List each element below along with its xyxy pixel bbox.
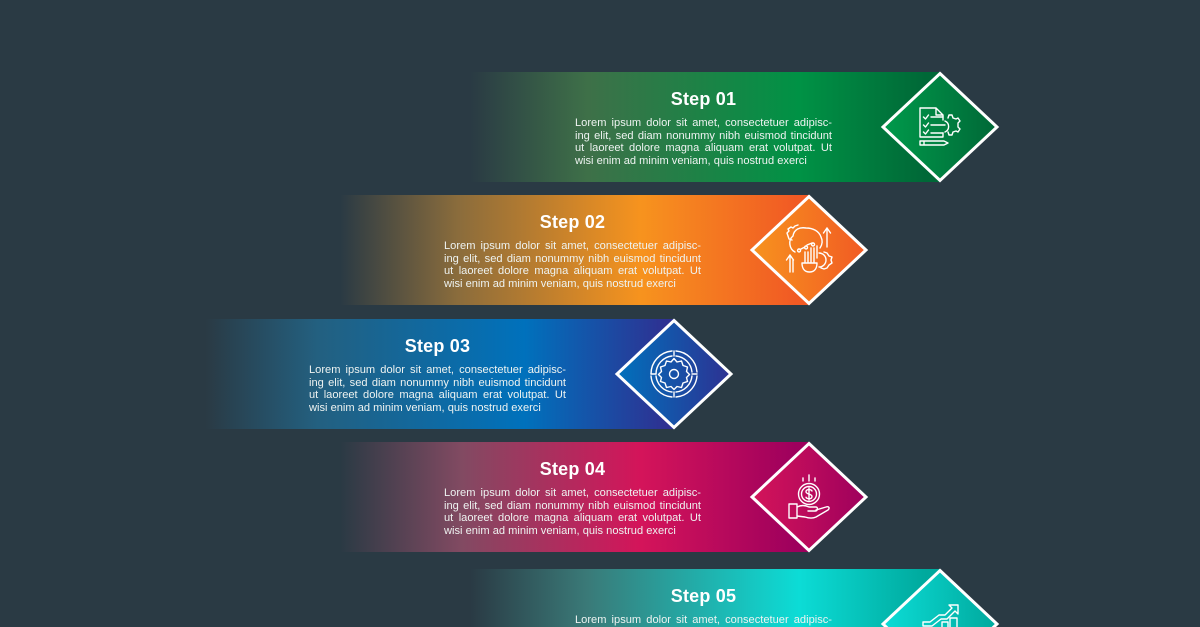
step 03 text: wisi enim ad minim veniam, quis nostrud exerci (309, 402, 541, 414)
step 04 text: Lorem ipsum dolor sit amet, consectetuer adipisc- (444, 487, 701, 499)
step 01 text: wisi enim ad minim veniam, quis nostrud exerci (575, 154, 807, 166)
step 03 text: ing elit, sed diam nonummy nibh euismod tincidunt (309, 376, 566, 388)
band: magenta gradient (340, 442, 810, 552)
step 04 panel (352, 442, 868, 552)
step 02 text: wisi enim ad minim veniam, quis nostrud exerci (444, 278, 676, 290)
step 03 text: ut laoreet dolore magna aliquam erat volutpat. Ut (309, 389, 566, 401)
band: blue gradient (205, 319, 675, 429)
step 02 text: ut laoreet dolore magna aliquam erat volutpat. Ut (444, 265, 701, 277)
step 01 text: ing elit, sed diam nonummy nibh euismod tincidunt (575, 130, 832, 142)
step 04 text: ing elit, sed diam nonummy nibh euismod tincidunt (444, 500, 701, 512)
step 05 heading: Step 05 (671, 586, 736, 606)
icon diamond: gear with cycle arrows (614, 318, 734, 430)
step 01 text (575, 117, 832, 166)
step 04 text (444, 487, 701, 536)
icon diamond: rising chart (880, 568, 1000, 627)
step 01 heading: Step 01 (671, 89, 736, 109)
step 03 panel (220, 318, 734, 430)
step 04 text: ut laoreet dolore magna aliquam erat volutpat. Ut (444, 512, 701, 524)
step 02 heading: Step 02 (540, 212, 605, 232)
step 03 text (309, 364, 566, 414)
icon diamond: coin over hand (750, 442, 868, 552)
step 04 text: wisi enim ad minim veniam, quis nostrud exerci (444, 524, 676, 536)
step 02 text (444, 240, 701, 290)
band: teal gradient (470, 569, 940, 627)
icon diamond: brain, gears and growth (750, 194, 868, 306)
icon diamond: document and gear (880, 72, 1000, 182)
step 04 heading: Step 04 (540, 459, 605, 479)
step 05 panel (484, 568, 1000, 627)
step 01 text: ut laoreet dolore magna aliquam erat volutpat. Ut (575, 142, 832, 154)
step 03 heading: Step 03 (405, 336, 470, 356)
step 02 panel (350, 194, 868, 306)
step 03 text: Lorem ipsum dolor sit amet, consectetuer adipisc- (309, 364, 566, 376)
band: green gradient (470, 72, 940, 182)
step 02 text: ing elit, sed diam nonummy nibh euismod tincidunt (444, 252, 701, 264)
step 01 panel (488, 72, 1000, 182)
band: orange gradient (340, 195, 810, 305)
step 01 text: Lorem ipsum dolor sit amet, consectetuer adipisc- (575, 117, 832, 129)
step 05 text: Lorem ipsum dolor sit amet, consectetuer adipisc- (575, 614, 832, 626)
step 02 text: Lorem ipsum dolor sit amet, consectetuer adipisc- (444, 240, 701, 252)
